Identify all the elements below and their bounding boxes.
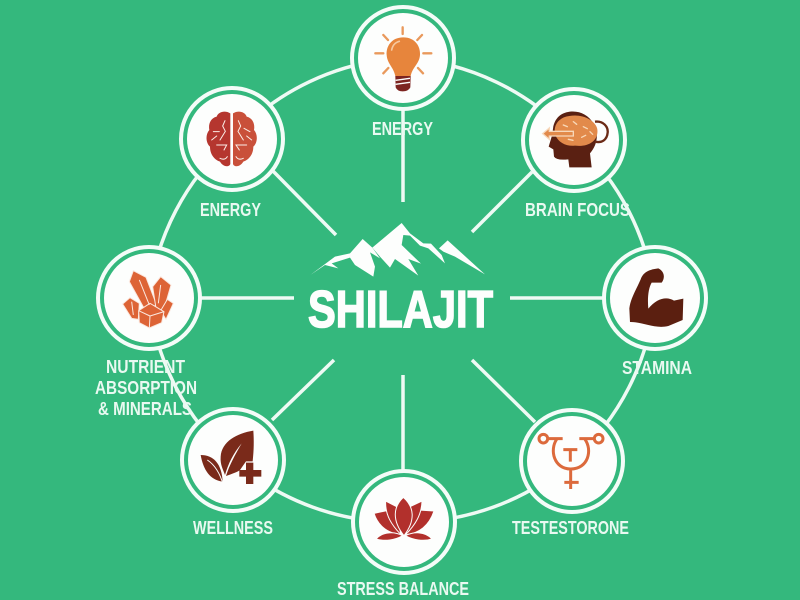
label: stamina: STAMINA (622, 358, 692, 378)
spokes (199, 108, 605, 472)
icon: testosterone symbol (539, 434, 603, 489)
title: SHILAJIT (308, 281, 493, 339)
icon: flexed arm (629, 268, 683, 327)
label: nutrient absorption (95, 357, 197, 419)
icon: light bulb (375, 27, 431, 91)
icon: head with brain (543, 112, 608, 167)
label: testosterone: TESTESTORONE (512, 518, 629, 538)
center logo (308, 223, 493, 339)
node discs (98, 7, 706, 573)
label: nutrient absorption: ABSORPTION (95, 378, 197, 398)
icon: leaves and plus (201, 431, 261, 485)
label: nutrient absorption: & MINERALS (98, 399, 192, 419)
label: energy left: ENERGY (200, 200, 261, 220)
icon: lotus (374, 497, 434, 540)
label: wellness: WELLNESS (193, 518, 273, 538)
mountain (310, 223, 485, 277)
label: nutrient absorption: NUTRIENT (106, 357, 185, 377)
icon: crystals (123, 271, 173, 328)
label: stress balance: STRESS BALANCE (337, 579, 469, 599)
icon: brain (207, 112, 257, 166)
connecting ring (149, 58, 655, 522)
label: energy top: ENERGY (372, 119, 433, 139)
label: brain focus: BRAIN FOCUS (525, 200, 630, 220)
